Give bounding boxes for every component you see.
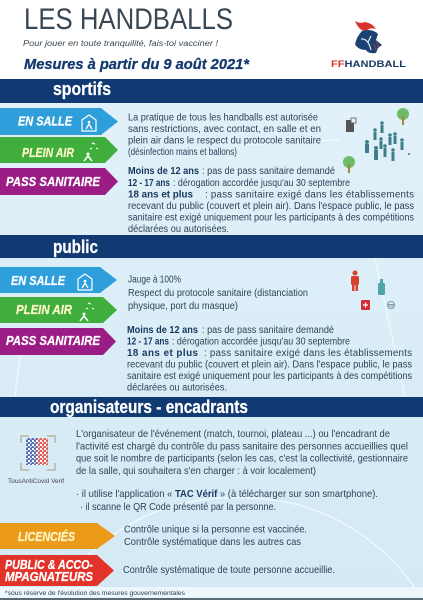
text: public control: Contrôle systématique de toute personne accueillie. — [123, 565, 335, 576]
text: TAC Verif steps: · il scanne le QR Code présenté par la personne. — [80, 502, 276, 513]
text: public pass rules: : pas de pass sanitaire demandé — [202, 325, 335, 336]
arrow: pass sanitaire (sportifs) — [0, 168, 118, 195]
QR caption: TousAntiCovid Verif — [8, 479, 64, 485]
arrow: plein air (public) — [0, 297, 117, 323]
arrow: public et accompagnateurs: MPAGNATEURS — [5, 570, 94, 584]
text: public pass rules: Moins de 12 ans — [127, 325, 199, 336]
arrow: plein air (sportifs): PLEIN AIR — [22, 146, 74, 160]
section banner: sportifs — [0, 79, 423, 103]
text: public pass rules — [127, 325, 412, 394]
text: licenciés control — [124, 525, 307, 548]
text: sportifs pass rules: 18 ans et plus — [128, 190, 194, 200]
text: public pass rules: 18 ans et plus — [127, 348, 199, 359]
section banner: organisateurs: organisateurs - encadrants — [50, 397, 248, 417]
footnote — [0, 587, 423, 600]
arrow: licenciés: LICENCIÉS — [18, 529, 76, 544]
text: organisateurs description — [76, 429, 408, 477]
arrow: en salle (sportifs) — [0, 108, 118, 135]
section banner: public: public — [53, 237, 98, 257]
title: LES HANDBALLS — [24, 3, 233, 36]
text: licenciés control: Contrôle unique si la personne est vaccinée. — [124, 525, 307, 536]
text: organisateurs description: L'organisateur de l'événement (match, tournoi, plateau ...) ou l'encadrant de — [76, 429, 390, 440]
text: licenciés control: Contrôle systématique dans les autres cas — [124, 537, 301, 548]
icon: red person — [351, 270, 359, 291]
text: sportifs pass rules — [128, 166, 414, 235]
text: public pass rules: 12 - 17 ans — [127, 336, 169, 348]
icon: QR code — [8, 436, 64, 485]
icon: first aid box — [361, 300, 370, 310]
footnote: *sous réserve de l'évolution des mesures gouvernementales — [5, 590, 186, 597]
arrow: en salle (public) — [0, 267, 117, 293]
text: public conditions — [128, 274, 308, 312]
text: sportifs conditions: sans restrictions, avec contact, en salle et en — [128, 124, 321, 135]
arrow: en salle (public): EN SALLE — [11, 274, 66, 288]
icon: hand gel — [346, 118, 356, 132]
arrow: licenciés — [0, 523, 115, 549]
text: sportifs conditions: (désinfection mains et ballons) — [128, 147, 237, 158]
date heading: Mesures à partir du 9 août 2021* — [24, 57, 250, 73]
text: public pass rules: : dérogation accordée jusqu'au 30 septembre — [172, 336, 350, 348]
arrow: pass sanitaire (sportifs): PASS SANITAIRE — [6, 175, 101, 189]
arrow: plein air (sportifs) — [0, 137, 118, 163]
arrow: en salle (sportifs): EN SALLE — [18, 114, 73, 128]
arrow: public et accompagnateurs — [0, 555, 114, 586]
logo: FFHandball: FF HANDBALL — [331, 59, 407, 69]
text: sportifs conditions: La pratique de tous les handballs est autorisée — [128, 112, 319, 124]
text: organisateurs description: de la salle, qui souhaitera s'en charger : à voir localement) — [76, 466, 316, 477]
text: sportifs conditions — [128, 112, 322, 158]
icon: gel bottle — [378, 279, 385, 295]
text: public conditions: physique, port du masque) — [128, 301, 238, 312]
section banner: organisateurs — [0, 397, 423, 417]
section banner: public — [0, 235, 423, 258]
arrow: public et accompagnateurs: PUBLIC & ACCO- — [5, 558, 93, 572]
text: sportifs pass rules: : pass sanitaire exigé dans les établissements — [205, 190, 414, 200]
text: public pass rules: : pass sanitaire exigé dans les établissements — [204, 348, 412, 359]
icon: people crowd and trees — [343, 108, 410, 173]
logo: FFHandball — [331, 21, 407, 69]
subtitle: Pour jouer en toute tranquilité, fais-toi vacciner ! — [23, 38, 219, 48]
text: public conditions: Jauge à 100% — [128, 274, 181, 286]
icon: mask — [388, 302, 394, 308]
section banner: sportifs: sportifs — [53, 79, 111, 99]
text: public pass rules: recevant du public (couvert et plein air). Dans l'espace public, le pass — [127, 360, 412, 370]
text: TAC Verif steps — [76, 489, 378, 513]
arrow: plein air (public): PLEIN AIR — [16, 303, 72, 317]
text: sportifs pass rules: : pas de pass sanitaire demandé — [202, 166, 336, 177]
text: public conditions: Respect du protocole sanitaire (distanciation — [128, 288, 308, 299]
text: sportifs pass rules: : dérogation accordée jusqu'au 30 septembre — [173, 178, 350, 189]
text: TAC Verif steps: · il utilise l'application « TAC Vérif » (à télécharger sur son smartphone). — [76, 489, 378, 500]
text: sportifs pass rules: recevant du public (couvert et plein air). Dans l'espace public, le pass — [128, 201, 414, 212]
arrow: pass sanitaire (public) — [0, 328, 116, 355]
text: sportifs pass rules: 12 - 17 ans — [128, 178, 170, 189]
text: sportifs pass rules: Moins de 12 ans — [128, 166, 200, 177]
text: sportifs pass rules: déclarées ou autorisées. — [128, 224, 229, 235]
text: public pass rules: déclarées ou autorisées. — [127, 382, 227, 394]
text: sportifs conditions: plein air dans le respect du protocole sanitaire — [128, 136, 322, 146]
arrow: pass sanitaire (public): PASS SANITAIRE — [6, 334, 101, 348]
